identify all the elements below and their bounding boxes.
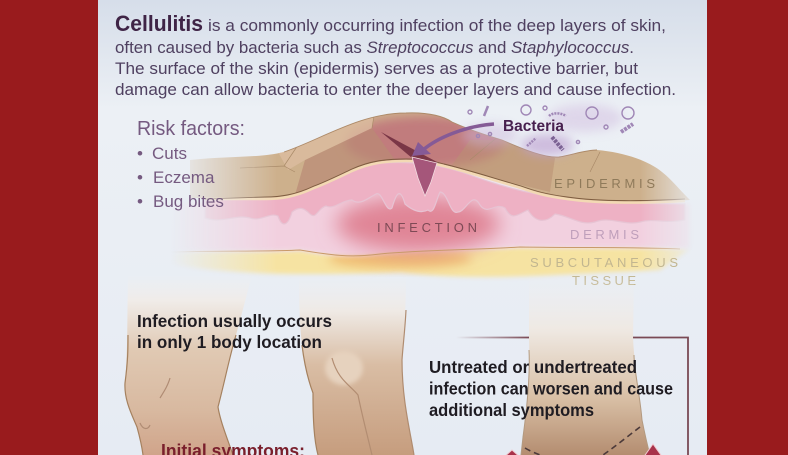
right leg [521,275,650,455]
risk factors heading: Risk factors: [137,118,245,140]
item: Eczema: • [137,168,143,187]
left leg outline left [125,335,143,455]
arrow: bacteria entering wound [412,124,494,156]
wound cut [381,132,437,196]
right leg outline [521,350,650,455]
fascia line [150,247,680,256]
skin cell cracks [240,116,600,172]
skin cross-section illustration [130,113,690,277]
intro line 3: The surface of the skin (epidermis) serves as a protective barrier, but [115,59,638,78]
orange glow under infection [328,250,472,268]
label: Bacteria: Bacteria [503,118,564,135]
subcutaneous tissue [130,247,690,277]
upper cut [381,132,437,170]
untreated line 1: Untreated or undertreated [429,357,637,377]
left leg [125,275,252,455]
item: Bug bites: Bug bites [153,192,224,211]
heading: Cellulitis: Cellulitis [115,11,203,36]
center leg outline right [402,310,414,455]
label: dermis: DERMIS [570,227,639,242]
label: subcutaneous: SUBCUTANEOUS [530,255,678,270]
purple haze left [462,123,518,147]
left knee crease [140,378,170,429]
risk factors list [137,118,245,211]
item: Eczema: Eczema [153,168,215,187]
epidermis lower edge [205,161,685,203]
panel: paper background [98,0,707,455]
upper dermis band with rete folds [205,163,685,224]
item: Cuts: • [137,144,143,163]
epidermis layer [190,113,690,202]
legs illustration [125,275,650,455]
arrow shaft [423,124,494,150]
label: epidermis: EPIDERMIS [554,176,655,191]
purple haze lower [521,134,573,156]
label: tissue: TISSUE [572,273,636,288]
epidermis outline [205,159,685,201]
callout frame [456,336,529,338]
note line 2: in only 1 body location [137,332,322,352]
label: infection: INFECTION [377,220,477,235]
red arrow left [503,450,521,455]
dermis [198,176,687,259]
red flush on hump [345,116,505,168]
infection redness [336,196,500,252]
deep wound [412,157,437,196]
item: Cuts: Cuts [152,144,187,163]
intro text block [115,11,676,99]
intro line 1: is a commonly occurring infection of the deep layers of skin, [208,16,666,35]
layer labels [377,176,678,288]
left leg outline right [218,335,236,455]
center knee tendon [332,358,372,455]
flush patch left [295,128,395,195]
text: untreated note [429,357,673,420]
intro line 4: damage can allow bacteria to enter the deeper layers and cause infection. [115,80,676,99]
center leg outline left [302,345,318,455]
right flush [452,140,555,192]
red arrow right [643,444,663,455]
untreated line 3: additional symptoms [429,400,594,420]
bacteria clusters [468,105,634,150]
intro line 2: often caused by bacteria such as Streptococcus and Staphylococcus. [115,38,634,57]
text: body location note [137,311,332,352]
callout frame right side [633,338,688,455]
arrow head [412,142,431,156]
dashed infection boundary [525,427,640,455]
bacteria cloud [462,104,634,156]
epidermis redness [240,114,600,195]
item: Bug bites: • [137,192,143,211]
note line 1: Infection usually occurs [137,311,332,331]
skin surface outline [284,113,597,157]
untreated line 2: infection can worsen and cause [429,378,673,398]
center leg [299,275,414,455]
purple haze [547,104,623,132]
pale cells [278,114,374,170]
center kneecap [325,351,363,385]
